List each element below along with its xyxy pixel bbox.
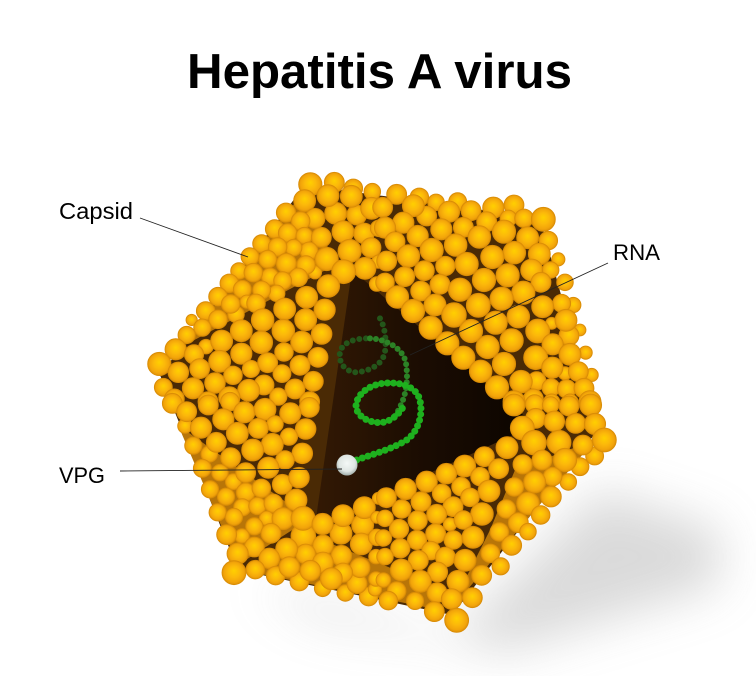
- title: Hepatitis A virus: [187, 45, 572, 99]
- drop shadow: [250, 490, 720, 650]
- capsid spheres: upper right: [373, 184, 601, 413]
- virus particle: [148, 172, 616, 632]
- capsid base shell: [160, 185, 598, 615]
- capsid spheres: lower right: [375, 394, 616, 632]
- RNA back coil, mid tone: [370, 338, 407, 418]
- capsid spheres: lower left: [162, 392, 385, 606]
- callout: RNA: [410, 240, 660, 355]
- callout: Capsid: Capsid: [59, 198, 133, 224]
- capsid spheres: upper left: [148, 172, 387, 412]
- VPG protein sphere: [336, 454, 358, 476]
- RNA strand: [340, 318, 421, 460]
- RNA back coil, faded: [340, 318, 386, 372]
- cut-away interior: [315, 270, 535, 525]
- callout: VPG: VPG: [59, 463, 105, 488]
- callout: RNA: RNA: [613, 240, 660, 265]
- facet underlay: [178, 190, 595, 610]
- callout: Capsid: [59, 198, 248, 257]
- RNA front coil, bright: [356, 383, 421, 460]
